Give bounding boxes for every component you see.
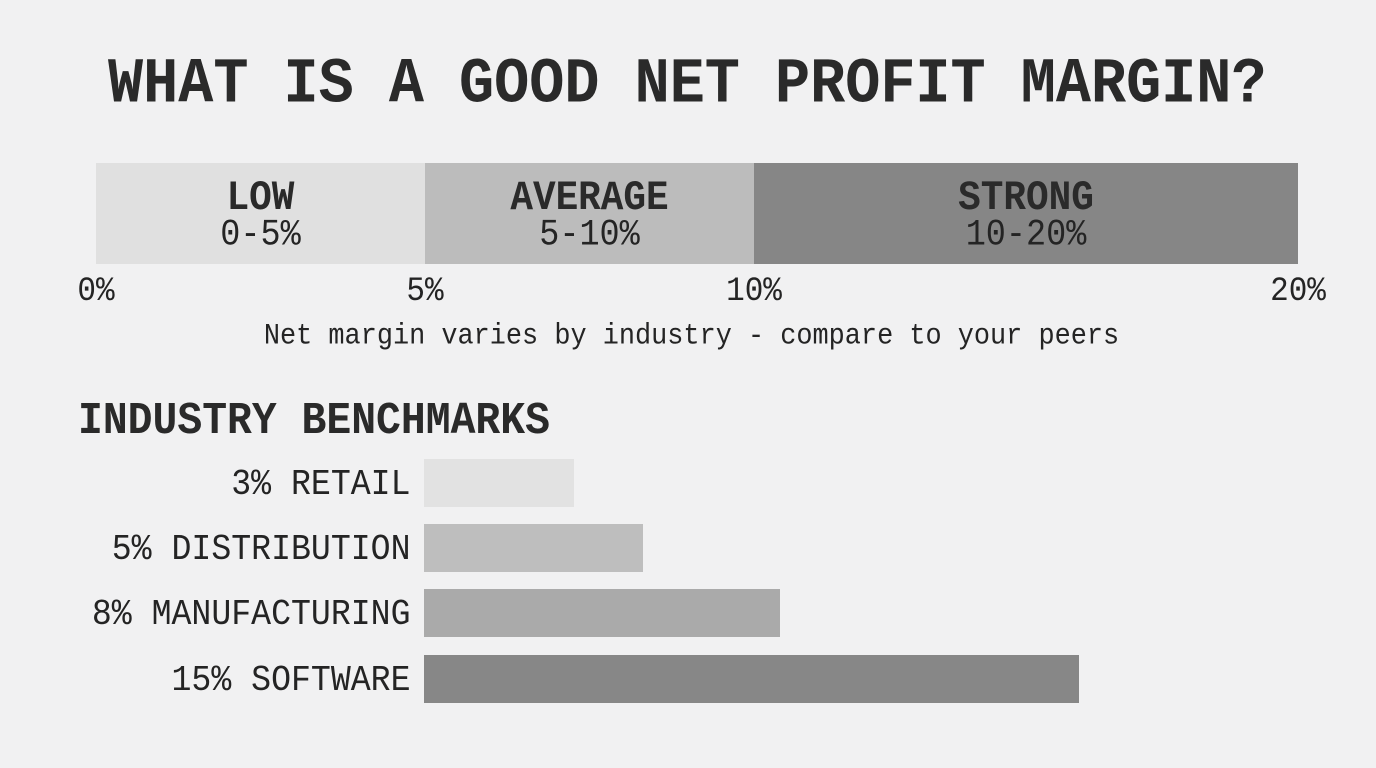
row: manufacturing — [92, 589, 780, 637]
title: WHAT IS A GOOD NET PROFIT MARGIN? — [108, 48, 1266, 121]
axis label 0%: 0% — [77, 272, 115, 311]
row: software — [172, 655, 1079, 703]
segment: average — [425, 163, 754, 264]
axis label 10%: 10% — [726, 272, 782, 311]
segment: low: 0-5% — [220, 215, 301, 257]
note: Net margin varies by industry - compare to your peers — [264, 320, 1119, 353]
segment: strong — [754, 163, 1298, 264]
row: software: 15% SOFTWARE — [172, 659, 410, 701]
segment: strong: 10-20% — [966, 215, 1086, 257]
axis label 5%: 5% — [406, 272, 444, 311]
benchmark bar chart — [92, 459, 1079, 703]
row: distribution: 5% DISTRIBUTION — [112, 528, 410, 570]
segment: average: 5-10% — [539, 215, 640, 257]
segment: low — [96, 163, 425, 264]
segment: average: AVERAGE — [510, 176, 669, 222]
segment: low: LOW — [227, 176, 294, 222]
row: manufacturing: 8% MANUFACTURING — [92, 593, 410, 635]
section heading: INDUSTRY BENCHMARKS — [78, 397, 550, 447]
segment: strong: STRONG — [958, 176, 1094, 222]
row: retail — [231, 459, 574, 507]
row: distribution — [112, 524, 643, 572]
margin scale bar — [77, 163, 1326, 311]
axis label 20%: 20% — [1270, 272, 1326, 311]
row: retail: 3% RETAIL — [231, 463, 410, 505]
